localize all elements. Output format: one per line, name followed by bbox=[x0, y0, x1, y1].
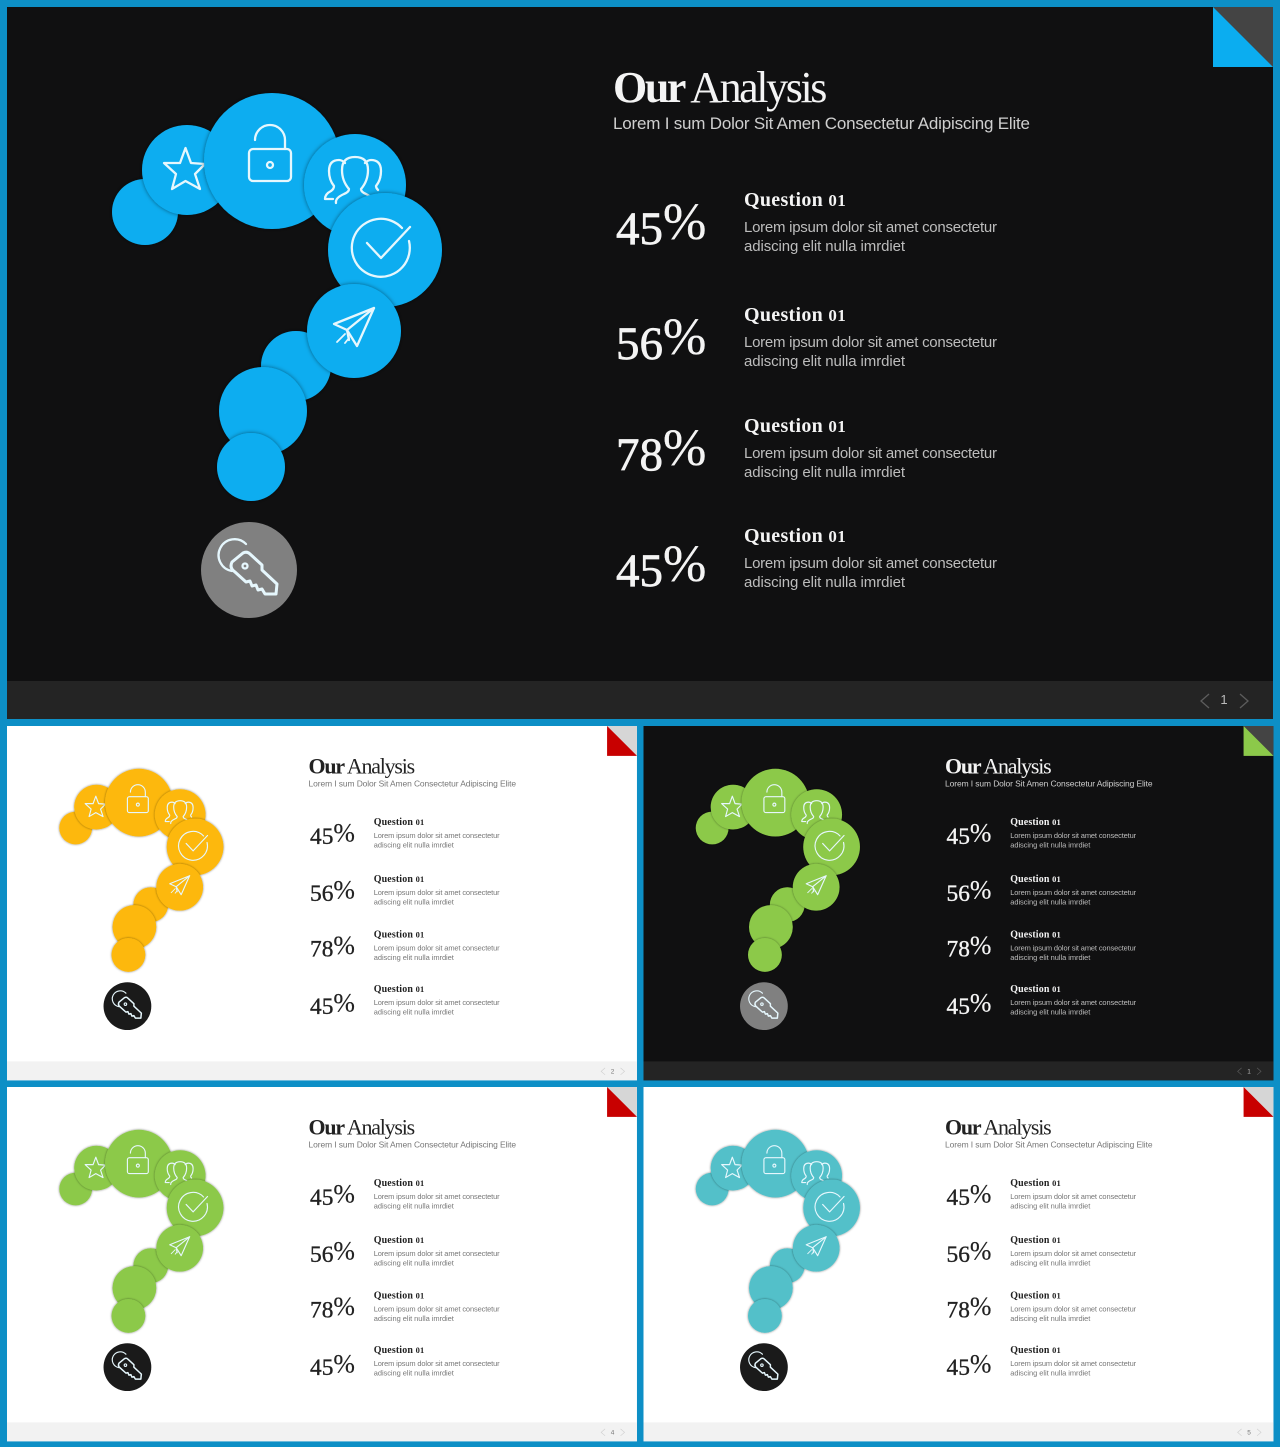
stat row 2: adiscing elit nulla imrdiet bbox=[1010, 1259, 1091, 1268]
stat row 4: % bbox=[970, 1350, 991, 1379]
stat row 3: % bbox=[970, 931, 991, 960]
stat row 4: Question 01 bbox=[1010, 1345, 1061, 1356]
stat row 4: 45 bbox=[310, 1355, 333, 1381]
stat row 3: Lorem ipsum dolor sit amet consectetur bbox=[374, 1304, 500, 1313]
stat row 4: adiscing elit nulla imrdiet bbox=[1010, 1369, 1091, 1378]
stat row 4: Lorem ipsum dolor sit amet consectetur bbox=[374, 1359, 500, 1368]
title: Our Analysis bbox=[945, 753, 1051, 778]
icon: paper plane bbox=[806, 1237, 826, 1256]
stat row 2 bbox=[947, 1235, 1137, 1268]
question mark graphic bbox=[59, 769, 223, 972]
corner fold bbox=[1244, 1087, 1273, 1117]
stat row 1: adiscing elit nulla imrdiet bbox=[374, 1201, 455, 1210]
stat row 2 bbox=[310, 1235, 500, 1268]
stat row 3 bbox=[616, 415, 997, 481]
stat row 1: adiscing elit nulla imrdiet bbox=[1010, 1201, 1091, 1210]
icon: key badge bbox=[201, 522, 297, 618]
icon: check bbox=[179, 1192, 208, 1221]
icon: check bbox=[179, 831, 208, 860]
icon: lock bbox=[127, 785, 148, 813]
icon: star bbox=[722, 1157, 742, 1178]
icon: lock bbox=[764, 785, 785, 813]
stat row 3: adiscing elit nulla imrdiet bbox=[1010, 1314, 1091, 1323]
stat row 1: % bbox=[333, 818, 355, 847]
icon: key badge bbox=[740, 1343, 788, 1391]
page navigation: 2 bbox=[611, 1068, 615, 1075]
stat row 1: adiscing elit nulla imrdiet bbox=[1010, 840, 1091, 849]
page navigation bbox=[601, 1068, 625, 1075]
icon: paper plane bbox=[170, 1237, 190, 1256]
stat row 1: Question 01 bbox=[744, 189, 846, 211]
icon: star bbox=[85, 1157, 106, 1178]
stat row 4: Question 01 bbox=[1010, 984, 1061, 995]
icon: paper plane bbox=[334, 308, 374, 346]
stat row 4: % bbox=[663, 536, 706, 593]
stat row 1: Lorem ipsum dolor sit amet consectetur bbox=[1010, 831, 1137, 840]
stat row 2: adiscing elit nulla imrdiet bbox=[1010, 898, 1091, 907]
icon: people bbox=[802, 1162, 830, 1185]
stat row 2: 56 bbox=[616, 318, 663, 370]
icon: lock bbox=[764, 1146, 785, 1174]
stat row 2: Question 01 bbox=[1010, 874, 1061, 885]
stat row 2: Lorem ipsum dolor sit amet consectetur bbox=[1010, 1249, 1137, 1258]
stat row 4: % bbox=[333, 1350, 355, 1379]
stat row 4: adiscing elit nulla imrdiet bbox=[1010, 1008, 1091, 1017]
footer bar bbox=[7, 681, 1273, 719]
page navigation: 4 bbox=[611, 1429, 615, 1436]
stat row 3: % bbox=[970, 1292, 991, 1321]
stat row 3 bbox=[947, 929, 1137, 962]
stat row 3: adiscing elit nulla imrdiet bbox=[374, 953, 455, 962]
stat row 1: 45 bbox=[947, 1185, 970, 1211]
subtitle: Lorem I sum Dolor Sit Amen Consectetur Adipiscing Elite bbox=[309, 779, 516, 789]
stat row 4: adiscing elit nulla imrdiet bbox=[374, 1008, 455, 1017]
stat row 4: Lorem ipsum dolor sit amet consectetur bbox=[744, 555, 997, 572]
stat row 3: 78 bbox=[310, 1297, 333, 1323]
title: Our Analysis bbox=[309, 753, 415, 778]
stat row 2: Question 01 bbox=[374, 874, 424, 885]
stat row 1: 45 bbox=[310, 1185, 333, 1211]
question mark graphic bbox=[696, 769, 860, 972]
title: Our Analysis bbox=[613, 63, 826, 112]
icon: star bbox=[85, 796, 106, 817]
corner fold bbox=[607, 1087, 637, 1117]
icon: key badge bbox=[104, 1343, 151, 1391]
stat row 1: Question 01 bbox=[374, 817, 424, 828]
icon: lock bbox=[127, 1146, 148, 1174]
stat row 1: Question 01 bbox=[1010, 1178, 1061, 1189]
subtitle: Lorem I sum Dolor Sit Amen Consectetur Adipiscing Elite bbox=[945, 1140, 1153, 1150]
icon: people bbox=[802, 801, 830, 824]
stat row 1 bbox=[616, 189, 997, 255]
stat row 4: % bbox=[333, 989, 355, 1018]
stat row 3: adiscing elit nulla imrdiet bbox=[744, 464, 906, 481]
stat row 1: % bbox=[970, 818, 991, 847]
stat row 2: Question 01 bbox=[374, 1235, 424, 1246]
panel: main dark slide, blue bbox=[7, 7, 1273, 719]
stat row 4: 45 bbox=[947, 994, 970, 1020]
stat row 4: Question 01 bbox=[744, 525, 846, 547]
stat row 2: 56 bbox=[947, 881, 970, 907]
icon: people bbox=[165, 801, 193, 824]
stat row 2: Lorem ipsum dolor sit amet consectetur bbox=[374, 888, 500, 897]
stat row 3: 78 bbox=[310, 936, 333, 962]
stat row 2: 56 bbox=[310, 1242, 333, 1268]
question mark graphic bbox=[112, 93, 442, 501]
stat row 4: 45 bbox=[616, 545, 663, 597]
stat row 3: Lorem ipsum dolor sit amet consectetur bbox=[374, 943, 500, 952]
stat row 1 bbox=[947, 1178, 1137, 1211]
title: Our Analysis bbox=[309, 1114, 415, 1139]
stat row 3: % bbox=[663, 420, 706, 477]
stat row 1: 45 bbox=[310, 824, 333, 850]
icon: key badge bbox=[740, 982, 788, 1030]
page navigation bbox=[1238, 1068, 1261, 1075]
stat row 2: 56 bbox=[310, 881, 333, 907]
stat row 4 bbox=[947, 1345, 1137, 1381]
stat row 1 bbox=[947, 817, 1137, 850]
stat row 4: Lorem ipsum dolor sit amet consectetur bbox=[1010, 1359, 1137, 1368]
icon: check bbox=[815, 831, 844, 860]
icon: paper plane bbox=[806, 876, 826, 895]
icon: people bbox=[325, 157, 381, 203]
icon: lock bbox=[249, 125, 291, 181]
stat row 2: 56 bbox=[947, 1242, 970, 1268]
stat row 2: % bbox=[970, 1237, 991, 1266]
stat row 4: 45 bbox=[310, 994, 333, 1020]
stat row 2: % bbox=[333, 1237, 355, 1266]
stat row 4: adiscing elit nulla imrdiet bbox=[744, 574, 906, 591]
subtitle: Lorem I sum Dolor Sit Amen Consectetur Adipiscing Elite bbox=[309, 1140, 516, 1150]
page navigation bbox=[1201, 692, 1248, 708]
stat row 4: Lorem ipsum dolor sit amet consectetur bbox=[374, 998, 500, 1007]
stat row 2: Lorem ipsum dolor sit amet consectetur bbox=[744, 334, 997, 351]
stat row 2: % bbox=[970, 876, 991, 905]
stat row 2 bbox=[616, 304, 997, 370]
footer bar bbox=[7, 1422, 637, 1441]
icon: check bbox=[815, 1192, 844, 1221]
question mark graphic bbox=[696, 1130, 860, 1333]
stat row 2: Question 01 bbox=[744, 304, 846, 326]
page navigation bbox=[1238, 1429, 1261, 1436]
stat row 3: Question 01 bbox=[374, 929, 424, 940]
stat row 2 bbox=[310, 874, 500, 907]
stat row 4 bbox=[310, 1345, 500, 1381]
stat row 4: 45 bbox=[947, 1355, 970, 1381]
page navigation bbox=[601, 1429, 625, 1436]
stat row 3: % bbox=[333, 931, 355, 960]
panel: light slide, yellow bbox=[7, 726, 637, 1080]
corner fold bbox=[607, 726, 637, 756]
stat row 2 bbox=[947, 874, 1137, 907]
stat row 2: adiscing elit nulla imrdiet bbox=[374, 898, 455, 907]
stat row 1: % bbox=[970, 1179, 991, 1208]
panel: light slide, green bbox=[7, 1087, 637, 1441]
stat row 4: % bbox=[970, 989, 991, 1018]
icon: people bbox=[165, 1162, 193, 1185]
stat row 2: adiscing elit nulla imrdiet bbox=[744, 353, 906, 370]
stat row 3 bbox=[310, 929, 500, 962]
stat row 1 bbox=[310, 1178, 500, 1211]
question mark graphic bbox=[59, 1130, 223, 1333]
stat row 1: 45 bbox=[616, 203, 663, 255]
page navigation: 1 bbox=[1247, 1068, 1251, 1075]
stat row 2: % bbox=[663, 309, 706, 366]
stat row 4: Lorem ipsum dolor sit amet consectetur bbox=[1010, 998, 1137, 1007]
subtitle: Lorem I sum Dolor Sit Amen Consectetur Adipiscing Elite bbox=[945, 779, 1153, 789]
stat row 3: % bbox=[333, 1292, 355, 1321]
stat row 1: % bbox=[663, 194, 706, 251]
corner fold bbox=[1244, 726, 1273, 756]
stat row 3 bbox=[947, 1290, 1137, 1323]
subtitle: Lorem I sum Dolor Sit Amen Consectetur Adipiscing Elite bbox=[613, 114, 1030, 133]
footer bar bbox=[644, 1061, 1273, 1080]
stat row 1: Lorem ipsum dolor sit amet consectetur bbox=[744, 219, 997, 236]
page navigation: 5 bbox=[1247, 1429, 1251, 1436]
title: Our Analysis bbox=[945, 1114, 1051, 1139]
stat row 1: Question 01 bbox=[1010, 817, 1061, 828]
stat row 1: Lorem ipsum dolor sit amet consectetur bbox=[374, 1192, 500, 1201]
stat row 4 bbox=[616, 525, 997, 597]
stat row 3 bbox=[310, 1290, 500, 1323]
stat row 4 bbox=[310, 984, 500, 1020]
stat row 3: adiscing elit nulla imrdiet bbox=[374, 1314, 455, 1323]
stat row 1 bbox=[310, 817, 500, 850]
icon: key badge bbox=[104, 982, 151, 1030]
stat row 4: Question 01 bbox=[374, 984, 424, 995]
stat row 3: Question 01 bbox=[1010, 1290, 1061, 1301]
icon: check bbox=[352, 219, 410, 277]
stat row 3: adiscing elit nulla imrdiet bbox=[1010, 953, 1091, 962]
stat row 1: 45 bbox=[947, 824, 970, 850]
footer bar bbox=[7, 1061, 637, 1080]
stat row 3: 78 bbox=[947, 1297, 970, 1323]
stat row 3: Question 01 bbox=[744, 415, 846, 437]
panel: light slide, teal bbox=[644, 1087, 1273, 1441]
stat row 1: Question 01 bbox=[374, 1178, 424, 1189]
icon: star bbox=[164, 148, 205, 189]
panel: dark slide, green bbox=[644, 726, 1273, 1080]
stat row 1: adiscing elit nulla imrdiet bbox=[374, 840, 455, 849]
stat row 2: adiscing elit nulla imrdiet bbox=[374, 1259, 455, 1268]
stat row 4 bbox=[947, 984, 1137, 1020]
stat row 4: adiscing elit nulla imrdiet bbox=[374, 1369, 455, 1378]
stat row 3: Lorem ipsum dolor sit amet consectetur bbox=[744, 445, 997, 462]
footer bar bbox=[644, 1422, 1273, 1441]
stat row 2: Question 01 bbox=[1010, 1235, 1061, 1246]
stat row 1: % bbox=[333, 1179, 355, 1208]
stat row 1: Lorem ipsum dolor sit amet consectetur bbox=[1010, 1192, 1137, 1201]
icon: paper plane bbox=[170, 876, 190, 895]
stat row 2: Lorem ipsum dolor sit amet consectetur bbox=[1010, 888, 1137, 897]
stat row 2: % bbox=[333, 876, 355, 905]
stat row 3: 78 bbox=[616, 429, 663, 481]
stat row 2: Lorem ipsum dolor sit amet consectetur bbox=[374, 1249, 500, 1258]
stat row 1: adiscing elit nulla imrdiet bbox=[744, 238, 906, 255]
stat row 3: Question 01 bbox=[1010, 929, 1061, 940]
stat row 3: Lorem ipsum dolor sit amet consectetur bbox=[1010, 1304, 1137, 1313]
corner fold bbox=[1213, 7, 1273, 67]
stat row 3: 78 bbox=[947, 936, 970, 962]
stat row 3: Question 01 bbox=[374, 1290, 424, 1301]
stat row 3: Lorem ipsum dolor sit amet consectetur bbox=[1010, 943, 1137, 952]
stat row 4: Question 01 bbox=[374, 1345, 424, 1356]
icon: star bbox=[722, 796, 742, 817]
stat row 1: Lorem ipsum dolor sit amet consectetur bbox=[374, 831, 500, 840]
page navigation: 1 bbox=[1220, 692, 1228, 707]
